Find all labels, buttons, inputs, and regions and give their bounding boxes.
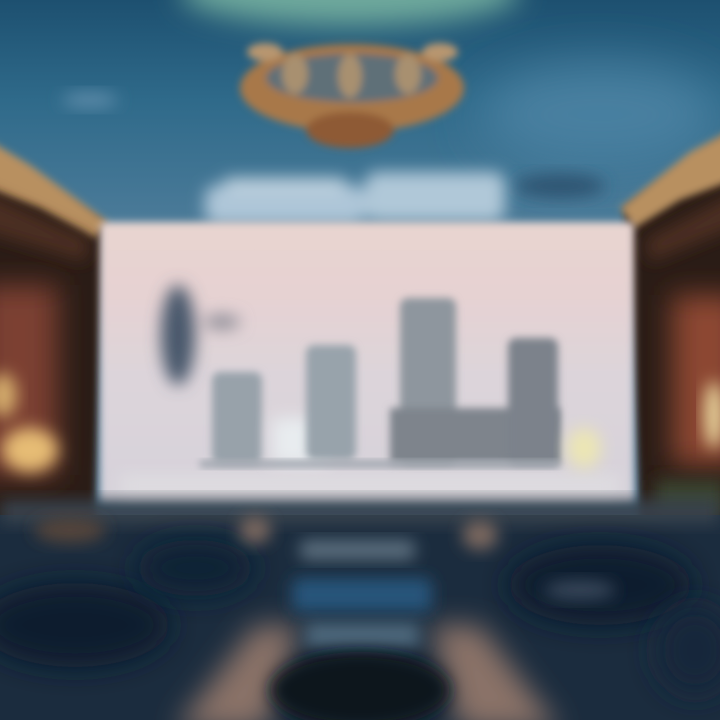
bar 2 [272, 418, 328, 464]
bar 1 [212, 372, 262, 464]
heading: blurred white title [205, 172, 505, 225]
bar 6 [508, 338, 558, 464]
bar 5 [390, 408, 560, 464]
bar chart: blurred skyline bars [161, 285, 601, 468]
bar 3 [306, 345, 356, 460]
base line of the chart [200, 460, 560, 468]
floor and cars [0, 500, 720, 720]
glow: yellow light [567, 428, 601, 468]
bar 4 [400, 298, 456, 464]
emblem: gold ornament [240, 43, 464, 148]
right building [620, 125, 720, 540]
left building [0, 135, 108, 540]
panel: central screen [100, 222, 634, 504]
figure: dark silhouette [161, 285, 240, 385]
